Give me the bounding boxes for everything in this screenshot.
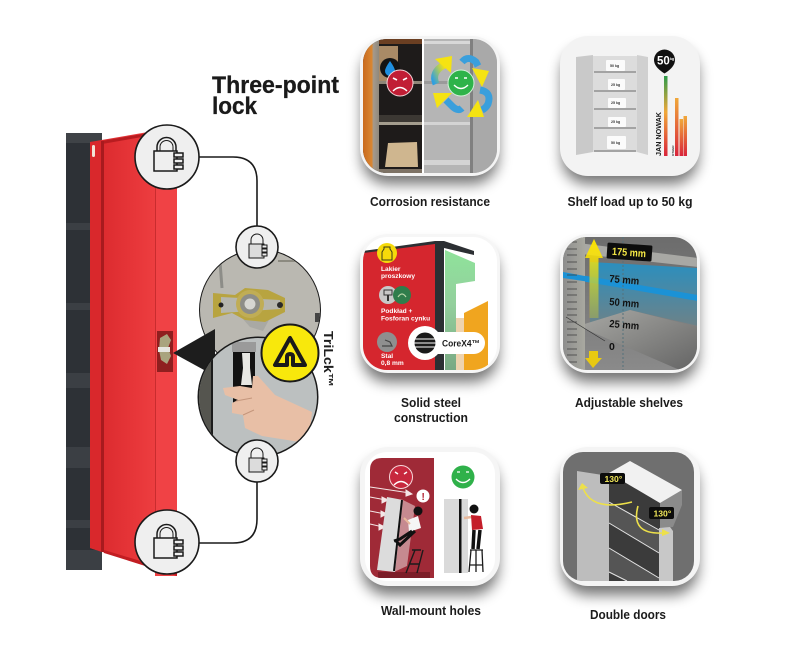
layer text: 0,8 mm	[381, 360, 404, 367]
warning badge	[416, 490, 430, 503]
height labels: 75 mm	[609, 273, 640, 288]
CoreX4 badge	[408, 326, 485, 360]
title	[212, 72, 339, 120]
title: Three-point	[212, 72, 339, 99]
icon: yellow TriLock badge	[262, 324, 318, 382]
caption: shelf load: Shelf load up to 50 kg	[568, 195, 692, 209]
bar chart: load comparison	[654, 76, 687, 156]
icon: sad face	[387, 70, 413, 96]
icon: padlock top	[135, 125, 199, 189]
cabinet with weights: 50 kg	[610, 64, 619, 68]
infographic	[66, 36, 708, 619]
bar chart: load comparison: JAN NOWAK	[654, 112, 663, 156]
pointer triangle	[173, 329, 215, 376]
connector lines	[199, 157, 257, 543]
angle labels: 130°	[654, 508, 672, 518]
caption: corrosion resistance: Corrosion resistance	[370, 195, 490, 209]
cabinet with weights: 25 kg	[611, 83, 620, 87]
height labels: 25 mm	[609, 318, 640, 333]
CoreX4 badge: CoreX4™	[442, 338, 480, 348]
cabinet with weights: 50 kg	[611, 141, 620, 145]
icon: happy face	[448, 70, 474, 96]
caption: adjustable shelves: Adjustable shelves	[575, 396, 683, 410]
bar chart: load comparison: OTHER	[671, 145, 675, 156]
layer icons	[377, 243, 411, 352]
panel: double doors	[560, 447, 700, 595]
angle labels	[600, 473, 674, 519]
height labels: 50 mm	[609, 296, 640, 311]
caption: solid steel construction: Solid steel	[401, 396, 461, 410]
height labels: 175 mm	[612, 246, 646, 260]
panel: wall-mount holes	[360, 447, 500, 595]
icon: padlock bottom	[135, 510, 199, 574]
height labels: 0	[609, 341, 615, 353]
layer text: Lakier	[381, 266, 401, 273]
door lock opening	[157, 331, 173, 372]
title: lock	[212, 93, 258, 120]
cabinet with weights: 25 kg	[611, 120, 620, 124]
panel: corrosion resistance	[360, 36, 500, 184]
clean side	[422, 39, 498, 173]
force arrows	[370, 487, 412, 530]
rusty side	[363, 39, 423, 173]
caption: double doors: Double doors	[590, 608, 666, 622]
panel: steel construction	[360, 234, 500, 382]
sad face	[390, 466, 412, 488]
cabinet body	[66, 133, 102, 570]
safe cabinet with person	[444, 499, 483, 573]
detail photo: handle with hand	[198, 336, 318, 458]
TriLck label: TriLck™	[321, 331, 336, 387]
panel: adjustable shelves	[560, 234, 700, 382]
layer text: Fosforan cynku	[381, 316, 430, 322]
caption: solid steel construction: construction	[394, 411, 468, 425]
detail photo: lock mechanism	[199, 252, 321, 353]
layer text: proszkowy	[381, 273, 415, 280]
icon: 50 kg pin: 50	[657, 56, 670, 68]
panel: shelf load	[560, 36, 700, 184]
red door	[90, 127, 177, 576]
icon: 50 kg pin	[654, 50, 675, 74]
layer text: Podkład +	[381, 308, 412, 315]
icon: padlock upper small	[236, 226, 278, 268]
arrow: up	[585, 239, 603, 318]
cabinet with weights: 25 kg	[611, 101, 620, 105]
layer text: Stal	[381, 353, 393, 360]
arrow: down	[585, 351, 602, 368]
icon: 50 kg pin: kg	[670, 57, 674, 61]
warning badge: !	[422, 492, 425, 503]
caption: wall-mount holes: Wall-mount holes	[381, 604, 481, 618]
caption: solid steel construction	[394, 396, 468, 425]
tipping cabinet with climber	[377, 497, 423, 573]
layer text	[381, 266, 430, 367]
icon: rotating arrows	[433, 56, 489, 117]
icon: water drop	[380, 58, 400, 78]
height labels	[606, 242, 653, 353]
icon: padlock lower small	[236, 440, 278, 482]
swing arrows	[583, 488, 664, 533]
ruler ticks	[567, 242, 577, 362]
cabinet with weights	[576, 55, 648, 155]
happy face	[452, 466, 474, 488]
angle labels: 130°	[604, 474, 623, 484]
